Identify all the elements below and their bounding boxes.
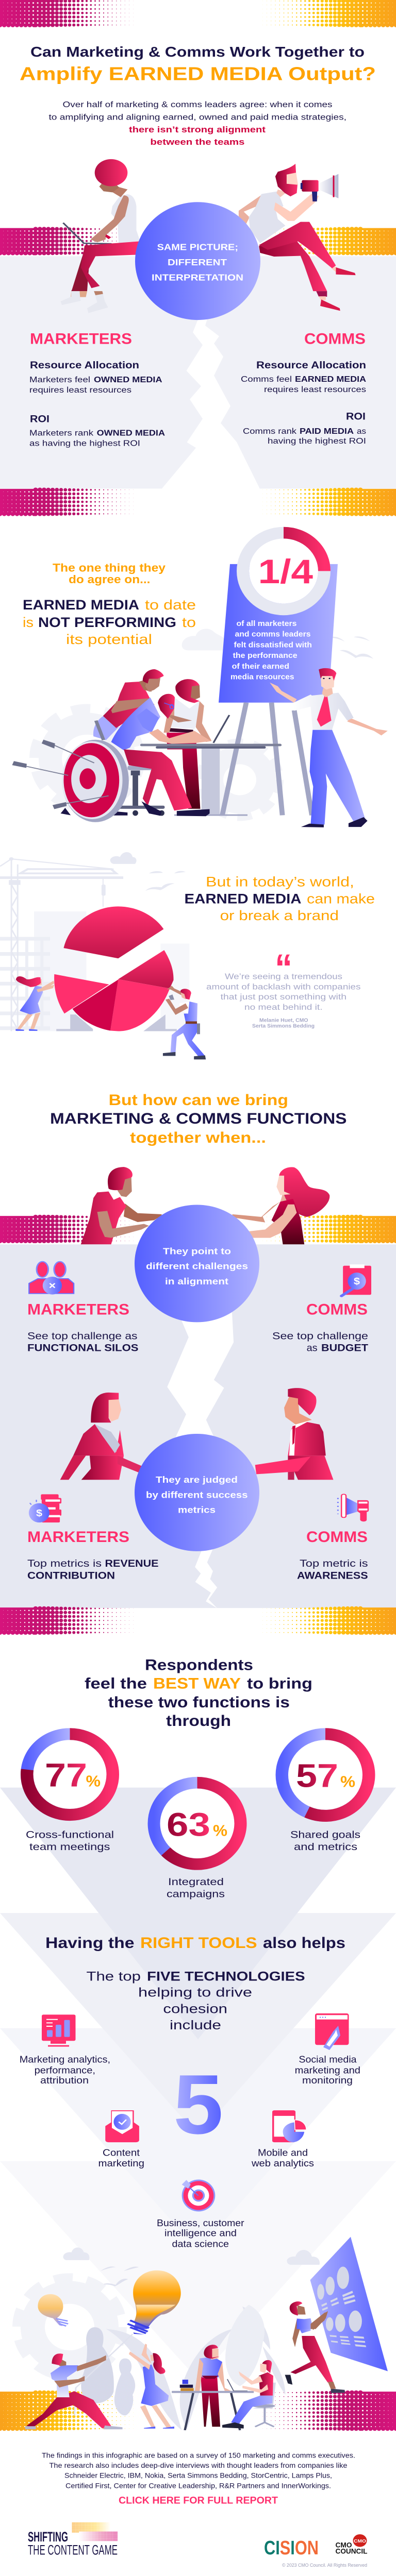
icon: budget clipboard: $ <box>354 1276 360 1287</box>
column: comms challenge: BUDGET <box>321 1343 369 1353</box>
pull quote: Serta Simmons Bedding <box>252 1024 315 1029</box>
icon: functional silos <box>29 1262 74 1295</box>
donut: 63 percent: 63 <box>167 1806 210 1843</box>
panel: challenges and metrics background <box>0 1244 396 1608</box>
text: top five technologies <box>87 1969 305 2032</box>
illustration: broken pie chart with builders <box>15 906 206 1059</box>
poster with one quarter statistic: of all marketers <box>236 619 296 628</box>
column: comms: EARNED MEDIA <box>295 375 366 384</box>
heading: best way: these two functions is <box>108 1694 290 1711</box>
halftone band: lower divider <box>0 489 396 516</box>
statement: the one thing they agree on: NOT PERFORMING <box>38 615 176 630</box>
column: comms: Resource Allocation <box>256 360 366 371</box>
callout circle: different challenges <box>135 1205 259 1322</box>
column: marketers metrics: Top metrics is <box>27 1558 102 1569</box>
donut: 57 percent: Shared goals <box>290 1829 360 1840</box>
statement: the one thing they agree on: to date <box>145 597 196 613</box>
heading: right tools: also helps <box>263 1935 345 1952</box>
logo: cmo council: CMO <box>335 2541 352 2549</box>
callout circle: different metrics: by different success <box>146 1490 248 1500</box>
figure: woman with laptop <box>63 159 140 297</box>
panel: marketers vs comms background <box>0 256 396 488</box>
callout circle: different metrics <box>135 1434 259 1551</box>
column: marketers challenge <box>27 1301 138 1353</box>
call to action: CLICK HERE FOR FULL REPORT <box>119 2495 278 2506</box>
heading: best way <box>85 1657 312 1730</box>
figure: man's shoe <box>316 291 340 311</box>
background decoration: gears <box>36 710 279 817</box>
column: comms: PAID MEDIA <box>300 427 354 436</box>
column: comms metrics: AWARENESS <box>297 1570 368 1581</box>
background decoration: clouds and birds <box>63 2247 320 2286</box>
figure: woman in suit <box>73 1393 124 1455</box>
halftone band: behind figures <box>0 228 396 255</box>
heading: bringing functions together: MARKETING & COMMS FUNCTIONS <box>50 1111 346 1127</box>
logo: cmo council: COUNCIL <box>335 2548 368 2556</box>
copyright: © 2023 CMO Council. All Rights Reserved <box>282 2563 367 2568</box>
donut: 77 percent: 77 <box>45 1757 87 1793</box>
poster with one quarter statistic: the performance <box>233 651 298 660</box>
figure: desk <box>172 2379 254 2430</box>
figure: man pulling rope <box>25 2353 123 2429</box>
number five: 5 <box>173 2057 223 2151</box>
callout circle: different challenges: in alignment <box>165 1276 228 1286</box>
column: marketers: OWNED MEDIA <box>97 429 165 438</box>
label: social media: Social media <box>299 2054 357 2065</box>
label: social media <box>295 2054 360 2086</box>
callout circle: different metrics: metrics <box>178 1505 216 1515</box>
label: business intelligence: Business, customer <box>157 2217 244 2229</box>
pull quote <box>206 946 361 1029</box>
label: analytics <box>20 2054 110 2086</box>
icon: analytics monitor <box>42 2014 75 2046</box>
donut: 77 percent: team meetings <box>29 1842 110 1853</box>
figure: woman in suit, lower body <box>60 1455 141 1480</box>
label: analytics: performance, <box>35 2065 95 2076</box>
donut: 63 percent: % <box>213 1822 227 1840</box>
label: analytics: Marketing analytics, <box>20 2054 110 2065</box>
icon: revenue coins <box>29 1494 61 1522</box>
title: Can Marketing & Comms Work Together to <box>30 44 365 60</box>
column: marketers challenge: FUNCTIONAL SILOS <box>27 1343 138 1353</box>
background decoration: cloud and birds <box>182 629 373 659</box>
label: content marketing <box>98 2147 144 2169</box>
statement: the one thing they agree on: is <box>23 615 34 630</box>
donut: 63 percent <box>154 1783 240 1900</box>
figure: woman reaching up <box>129 2344 174 2429</box>
column: marketers: MARKETERS <box>30 331 132 348</box>
statement: earned media make or break <box>185 874 375 923</box>
intro paragraph: to amplifying and aligning earned, owned and paid media strategies, <box>49 113 346 122</box>
column: marketers: Marketers feel <box>29 376 90 384</box>
illustration: team members <box>25 2311 345 2430</box>
label: mobile analytics: Mobile and <box>258 2147 308 2158</box>
figure: man in suit, lower body <box>255 1455 334 1480</box>
illustration: charts on board <box>317 2267 366 2347</box>
heading: best way: to bring <box>247 1675 312 1692</box>
column: comms challenge: COMMS <box>306 1301 368 1318</box>
statement: earned media make or break: or break a brand <box>220 908 339 923</box>
background decoration: gear and plants <box>18 2279 285 2430</box>
poster with one quarter statistic: and comms leaders <box>235 630 311 639</box>
halftone band: after metrics <box>0 1607 396 1635</box>
text: top five technologies: include <box>170 2018 221 2032</box>
column: comms challenge: See top challenge <box>272 1331 368 1342</box>
survey note: The findings in this infographic are based on a survey of 150 marketing and comms executives. <box>42 2452 355 2460</box>
poster with one quarter statistic <box>219 533 338 703</box>
column: comms: having the highest ROI <box>268 436 366 446</box>
background funnel triangles <box>0 1788 396 2380</box>
crack between the teams <box>162 315 260 489</box>
figure: books and mug on desk <box>180 2380 194 2391</box>
column: marketers: requires least resources <box>29 385 131 395</box>
statement: the one thing they agree on: EARNED MEDIA <box>23 597 139 613</box>
survey note: Certified First, Center for Creative Leadership, R&R Partners and InnerWorkings. <box>65 2482 331 2490</box>
figure: man with megaphone <box>239 164 356 291</box>
heading: right tools: Having the <box>45 1935 135 1952</box>
column: marketers metrics: REVENUE <box>105 1558 159 1569</box>
text: top five technologies: FIVE TECHNOLOGIES <box>147 1969 305 1984</box>
column: comms: Comms feel <box>241 375 292 384</box>
heading: best way: feel the <box>85 1675 147 1692</box>
statement: the one thing they agree on: do agree on... <box>69 573 150 586</box>
figure: man reaching <box>81 1167 161 1244</box>
pull quote: “ <box>275 946 292 990</box>
illustration: team at a desk with target <box>12 668 388 827</box>
label: business intelligence: data science <box>172 2239 229 2249</box>
statement: the one thing they agree on: its potential <box>66 632 152 647</box>
donut: 77 percent: Cross-functional <box>26 1829 114 1840</box>
crack below metrics <box>195 1549 217 1608</box>
logo: shifting the content game: SHIFTING <box>28 2529 68 2545</box>
icon: awareness megaphone <box>338 1494 369 1521</box>
statement: earned media make or break: EARNED MEDIA <box>185 891 301 906</box>
label: mobile analytics: web analytics <box>251 2158 314 2169</box>
label: mobile analytics <box>251 2147 314 2169</box>
label: content marketing: Content <box>103 2147 140 2158</box>
column: comms: requires least resources <box>264 385 366 394</box>
logo: shifting the content game: THE CONTENT GAME <box>28 2542 118 2557</box>
statement: the one thing they agree on: to <box>182 615 196 630</box>
donut: 63 percent: Integrated <box>168 1876 224 1888</box>
donut: 57 percent: 57 <box>296 1757 338 1794</box>
donut: 63 percent: campaigns <box>167 1889 225 1900</box>
heading: best way: Respondents <box>145 1657 253 1673</box>
icon: revenue coins: $ <box>36 1508 42 1519</box>
text: top five technologies: The top <box>87 1969 141 1984</box>
icon: budget clipboard <box>341 1264 371 1296</box>
intro paragraph: between the teams <box>150 137 244 147</box>
heading: bringing functions together: But how can we bring <box>109 1092 288 1109</box>
column: marketers challenge: MARKETERS <box>27 1301 129 1318</box>
figure: woman's shoes <box>61 291 108 313</box>
column: comms: as <box>357 427 366 436</box>
column: comms: Comms rank <box>243 427 297 436</box>
figure: woman pointing, head <box>290 2301 328 2329</box>
heading: bringing functions together: together when... <box>130 1130 266 1146</box>
logo: cmo council <box>335 2534 368 2556</box>
column: comms <box>241 331 366 446</box>
figure: seated man <box>222 2360 276 2429</box>
callout circle: same picture: INTERPRETATION <box>152 273 243 282</box>
callout circle: same picture <box>135 202 260 320</box>
callout circle: different challenges: different challenges <box>146 1261 248 1272</box>
logo: shifting the content game <box>28 2522 118 2557</box>
halftone band: bottom illustration <box>0 2392 396 2431</box>
pull quote: We’re seeing a tremendous <box>225 972 342 981</box>
heading: right tools <box>45 1935 345 1952</box>
column: marketers metrics: CONTRIBUTION <box>27 1570 115 1581</box>
label: business intelligence: intelligence and <box>164 2228 237 2239</box>
text: top five technologies: helping to drive <box>138 1985 252 1999</box>
figure: man in suit <box>284 1388 326 1455</box>
column: marketers: Marketers rank <box>29 429 94 438</box>
statement: earned media make or break: can make <box>307 891 375 906</box>
halftone band: behind reaching figures <box>0 1216 396 1243</box>
heading: best way: BEST WAY <box>153 1675 241 1692</box>
column: comms: COMMS <box>304 331 366 348</box>
figure: woman reaching <box>233 1167 329 1244</box>
label: analytics: attribution <box>40 2075 89 2086</box>
illustration: board with charts <box>310 2237 388 2371</box>
statement: the one thing they agree on: The one thing they <box>53 561 166 574</box>
donut: 57 percent <box>282 1734 369 1853</box>
column: comms metrics <box>297 1529 368 1581</box>
heading: bringing functions together <box>50 1092 346 1146</box>
column: marketers: ROI <box>30 414 50 425</box>
icon: light bulbs <box>38 2270 181 2415</box>
survey note <box>42 2452 355 2490</box>
column: comms metrics: Top metric is <box>300 1558 368 1569</box>
label: business intelligence <box>157 2217 244 2249</box>
intro paragraph: Over half of marketing & comms leaders agree: when it comes <box>63 100 332 109</box>
column: comms challenge: as <box>307 1343 318 1353</box>
figure: woman pointing at board <box>285 2311 345 2393</box>
figure: woman standing at desk <box>195 2345 231 2427</box>
pull quote: no meat behind it. <box>244 1003 323 1012</box>
survey note: Schneider Electric, IBM, Nokia, Serta Simmons Bedding, StorCentric, Lamps Plus, <box>64 2472 332 2480</box>
background decoration: crane and buildings <box>0 873 189 1031</box>
poster with one quarter statistic: 1/4 <box>258 553 313 591</box>
column: comms metrics: COMMS <box>306 1529 368 1546</box>
donut: 77 percent: % <box>86 1773 101 1790</box>
poster with one quarter statistic: felt dissatisfied with <box>234 641 312 649</box>
heading: best way: through <box>166 1713 231 1730</box>
donut: 57 percent: % <box>340 1773 355 1790</box>
icon: mobile analytics <box>272 2110 306 2142</box>
column: marketers: Resource Allocation <box>30 360 139 371</box>
pull quote: that just post something with <box>221 993 346 1002</box>
callout circle: different challenges: They point to <box>163 1246 231 1256</box>
intro paragraph: there isn’t strong alignment <box>129 125 266 134</box>
icon: target <box>182 2180 215 2212</box>
callout circle: same picture: DIFFERENT <box>168 258 227 267</box>
poster with one quarter statistic: of their earned <box>232 662 289 671</box>
column: marketers metrics: MARKETERS <box>27 1529 129 1546</box>
column: comms: ROI <box>346 411 366 422</box>
column: comms challenge <box>272 1301 369 1353</box>
column: marketers: as having the highest ROI <box>29 439 140 448</box>
statement: earned media make or break: But in today’s world, <box>206 874 354 889</box>
donut: 77 percent <box>26 1734 114 1853</box>
pull quote: Melanie Huet, CMO <box>259 1018 308 1023</box>
column: marketers: OWNED MEDIA <box>94 376 162 384</box>
column: marketers <box>29 331 165 448</box>
callout circle: same picture: SAME PICTURE; <box>157 242 238 252</box>
heading: right tools: RIGHT TOOLS <box>140 1935 257 1952</box>
callout circle: different metrics: They are judged <box>156 1475 238 1485</box>
icon: content envelope <box>105 2110 139 2142</box>
title: Amplify EARNED MEDIA Output? <box>20 63 376 84</box>
logo: cision: CISION <box>264 2537 319 2559</box>
survey note: The research also includes deep-dive interviews with thought leaders from companies like <box>50 2462 348 2470</box>
label: social media: marketing and <box>295 2065 360 2076</box>
column: marketers metrics <box>27 1529 159 1581</box>
donut: 57 percent: and metrics <box>294 1842 357 1853</box>
label: content marketing: marketing <box>98 2158 144 2169</box>
logo: cmo council: CMO <box>354 2538 366 2544</box>
title <box>20 44 376 84</box>
icon: social media tablet <box>315 2013 349 2050</box>
text: top five technologies: cohesion <box>163 2001 227 2016</box>
crack between challenges <box>167 1309 234 1437</box>
column: marketers challenge: See top challenge as <box>27 1331 138 1342</box>
label: social media: monitoring <box>302 2075 353 2086</box>
poster with one quarter statistic: media resources <box>230 673 294 681</box>
pull quote: amount of backlash with companies <box>206 982 361 991</box>
background decoration: crane top and cloud <box>0 852 186 873</box>
statement: the one thing they agree on <box>23 561 196 647</box>
halftone band: top <box>0 0 396 27</box>
intro paragraph <box>49 100 346 147</box>
